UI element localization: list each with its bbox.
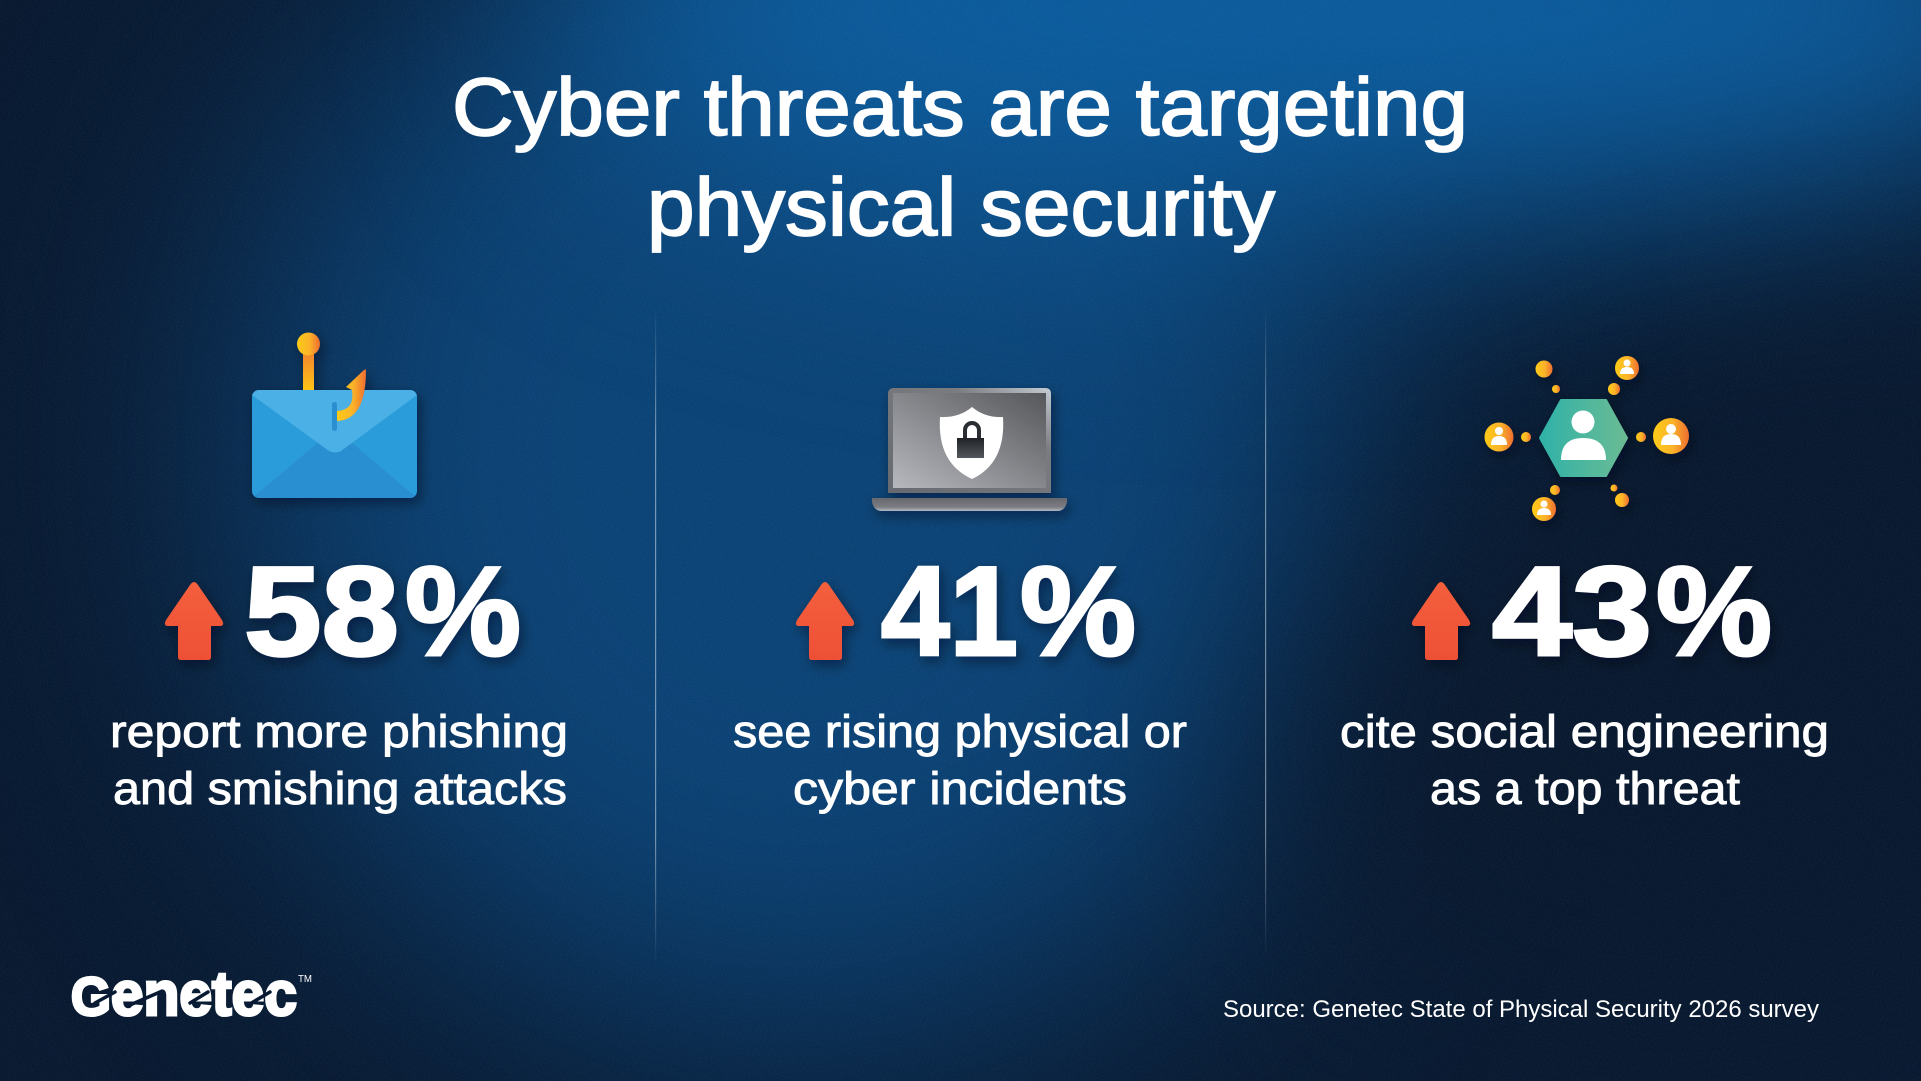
icon: up arrow <box>796 582 854 660</box>
number <box>244 540 521 682</box>
number: 58 <box>244 540 399 682</box>
number <box>1492 540 1772 682</box>
number: % <box>405 540 521 682</box>
title: Cyber threats are targeting <box>452 62 1468 153</box>
logo: Genetec: TM <box>298 974 312 985</box>
description: cyber incidents <box>793 763 1127 814</box>
number: % <box>1020 540 1136 682</box>
panel: incidents statistic <box>733 388 1187 814</box>
title: physical security <box>647 162 1275 253</box>
description: as a top threat <box>1430 763 1741 814</box>
description: and smishing attacks <box>113 763 567 814</box>
panel: social engineering statistic <box>1340 356 1829 814</box>
logo: Genetec: Genetec <box>71 960 297 1029</box>
number: % <box>1656 540 1772 682</box>
description <box>1340 706 1829 814</box>
number: 41 <box>881 540 1018 682</box>
description: cite social engineering <box>1340 706 1829 757</box>
icon: laptop with shield and lock <box>872 388 1067 511</box>
description <box>733 706 1187 814</box>
title <box>452 62 1468 253</box>
description: report more phishing <box>110 706 568 757</box>
description: see rising physical or <box>733 706 1187 757</box>
icon: up arrow <box>1412 582 1470 660</box>
icon: up arrow <box>165 582 223 660</box>
icon: fish hook through envelope <box>252 332 417 498</box>
icon: person network <box>1484 356 1689 521</box>
number <box>881 540 1136 682</box>
description <box>110 706 568 814</box>
panel: phishing statistic <box>110 332 568 814</box>
number: 43 <box>1492 540 1652 682</box>
source note: Source: Genetec State of Physical Security 2026 survey <box>1223 996 1819 1023</box>
